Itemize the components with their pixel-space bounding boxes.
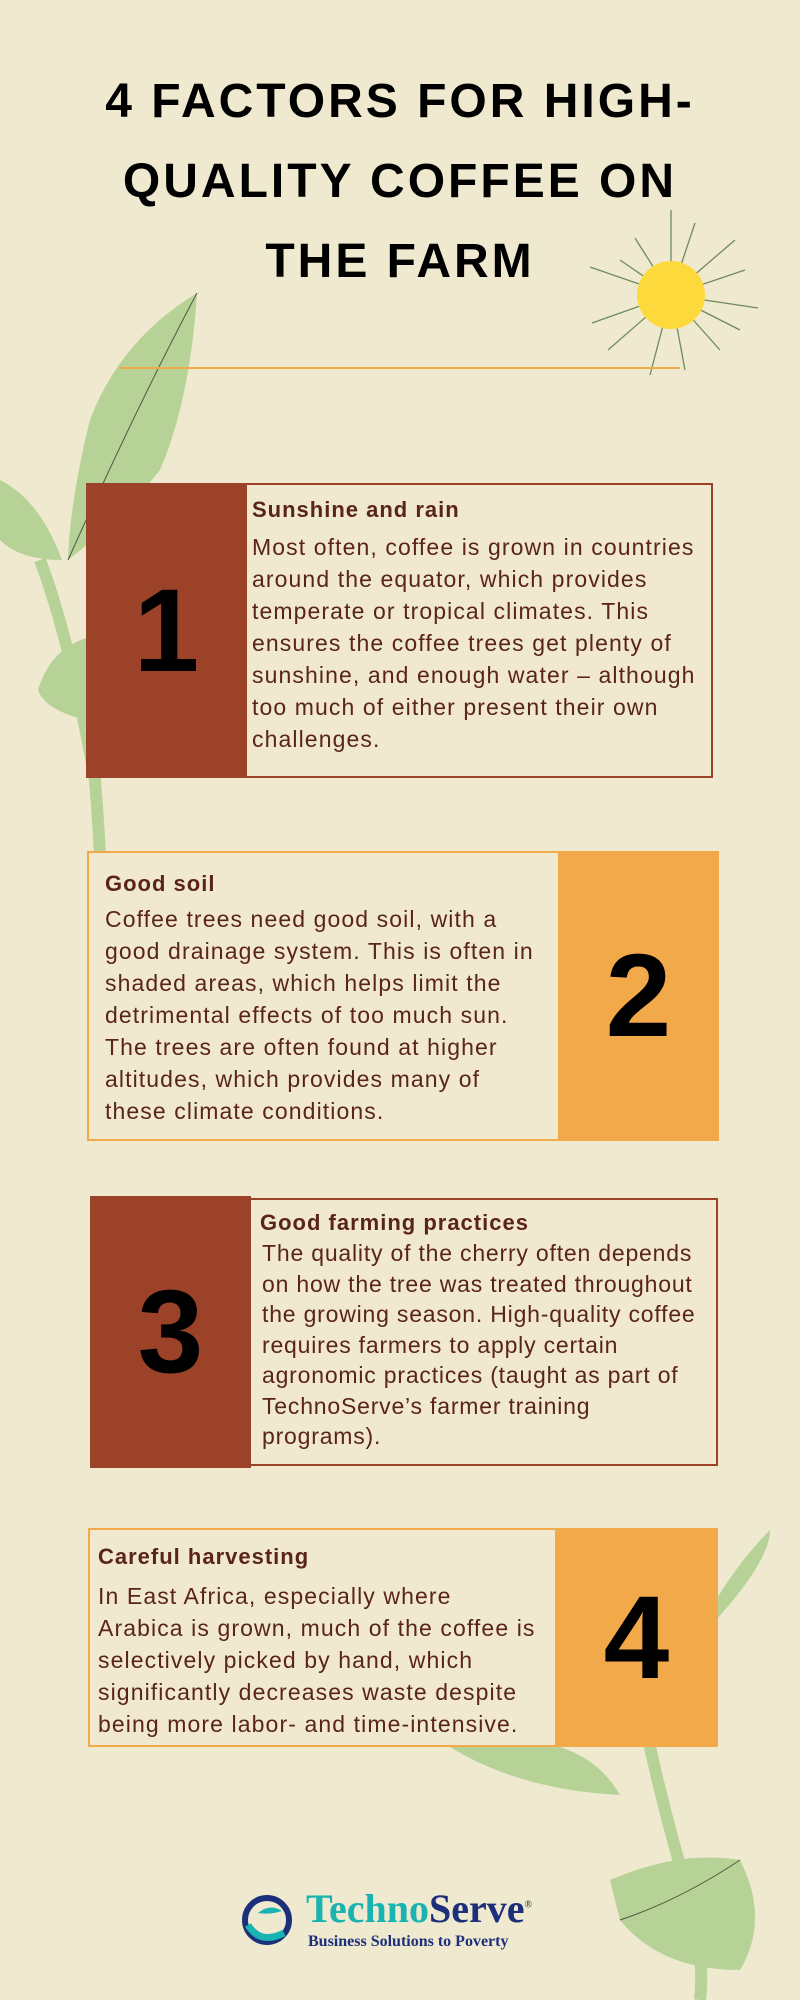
text: Arabica is grown, much of the coffee is — [98, 1615, 536, 1641]
text: the growing season. High-quality coffee — [262, 1301, 696, 1327]
heading: Good farming practices — [260, 1210, 529, 1235]
number 2 — [558, 851, 719, 1141]
text: detrimental effects of too much sun. — [105, 1002, 509, 1028]
logo: TechnoServe — [242, 1886, 532, 1950]
text: TechnoServe’s farmer training — [262, 1392, 590, 1418]
title: QUALITY COFFEE ON — [123, 155, 677, 208]
text: agronomic practices (taught as part of — [262, 1362, 678, 1388]
number 3 — [90, 1196, 251, 1468]
heading: Good soil — [105, 871, 215, 896]
panel: 4 careful harvesting — [88, 1528, 716, 1747]
text: challenges. — [252, 726, 380, 752]
tagline: Business Solutions to Poverty — [308, 1933, 508, 1950]
icon: sun — [590, 210, 758, 376]
text: The quality of the cherry often depends — [262, 1240, 692, 1266]
text: The trees are often found at higher — [105, 1034, 498, 1060]
panel: 2 good soil — [87, 851, 717, 1141]
text: on how the tree was treated throughout — [262, 1270, 693, 1296]
text — [252, 534, 696, 752]
text: temperate or tropical climates. This — [252, 598, 649, 624]
text: too much of either present their own — [252, 694, 659, 720]
text: altitudes, which provides many of — [105, 1066, 480, 1092]
text: good drainage system. This is often in — [105, 938, 534, 964]
text: around the equator, which provides — [252, 566, 647, 592]
title: 4 FACTORS FOR HIGH- — [105, 75, 695, 128]
brand name: TechnoServe® — [306, 1886, 532, 1931]
panel: 3 good farming practices — [90, 1198, 718, 1466]
text: Most often, coffee is grown in countries — [252, 534, 694, 560]
text — [105, 906, 534, 1124]
icon: logo swirl — [242, 1895, 292, 1945]
title: THE FARM — [265, 235, 535, 288]
text: sunshine, and enough water – although — [252, 662, 696, 688]
title — [105, 75, 695, 288]
number 1: 1 — [134, 564, 199, 696]
number 2: 2 — [606, 930, 671, 1062]
text: these climate conditions. — [105, 1098, 384, 1124]
text: shaded areas, which helps limit the — [105, 970, 501, 996]
panel: 1 sunshine and rain — [86, 483, 713, 778]
text: being more labor- and time-intensive. — [98, 1711, 518, 1737]
number 3: 3 — [138, 1266, 203, 1398]
text: programs). — [262, 1423, 381, 1449]
text: Coffee trees need good soil, with a — [105, 906, 497, 932]
heading: Sunshine and rain — [252, 497, 460, 522]
heading: Careful harvesting — [98, 1544, 309, 1569]
text: selectively picked by hand, which — [98, 1647, 473, 1673]
text: significantly decreases waste despite — [98, 1679, 517, 1705]
number 1 — [86, 483, 247, 778]
text: requires farmers to apply certain — [262, 1332, 618, 1358]
text — [262, 1240, 696, 1449]
text: ensures the coffee trees get plenty of — [252, 630, 672, 656]
text — [98, 1583, 536, 1737]
number 4: 4 — [604, 1572, 669, 1704]
text: In East Africa, especially where — [98, 1583, 452, 1609]
number 4 — [555, 1528, 718, 1747]
